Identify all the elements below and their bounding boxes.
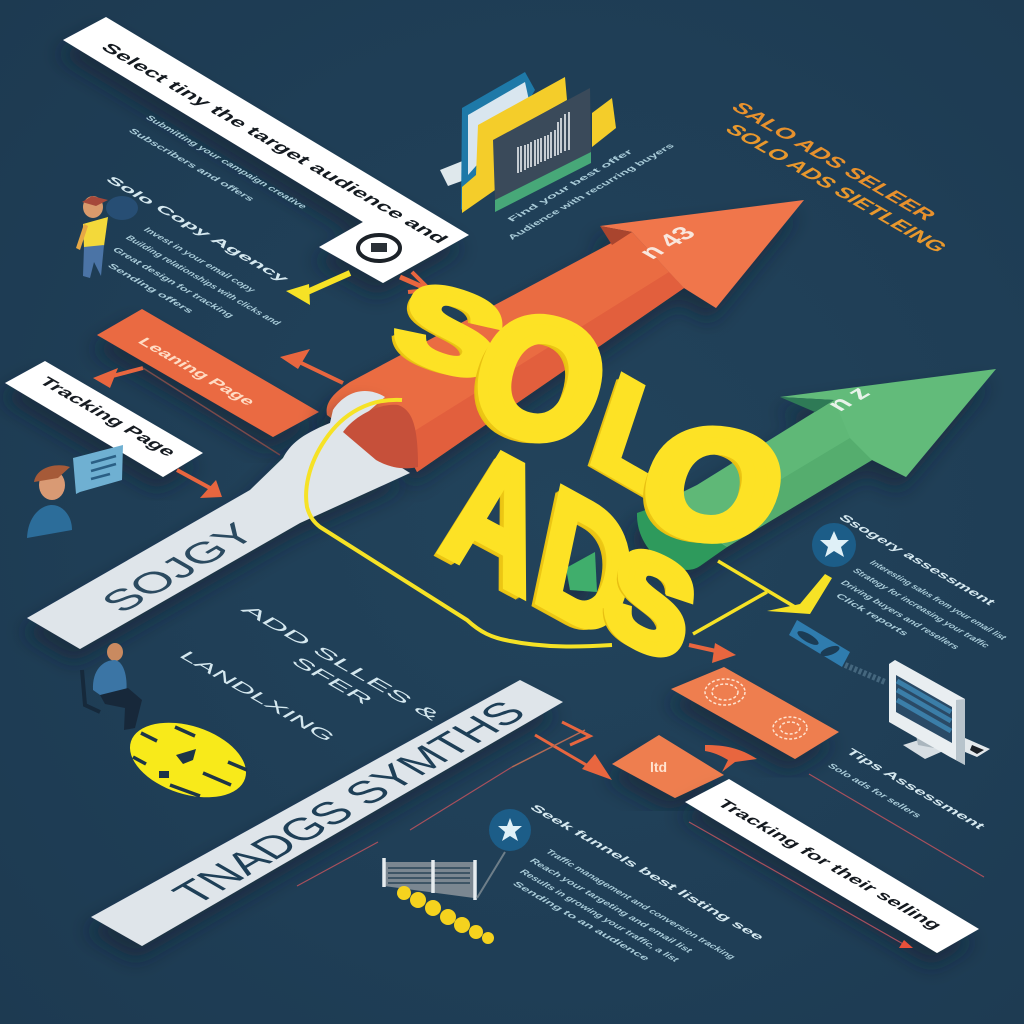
- text block: right strategy: Click reports: [833, 592, 911, 637]
- icon: seated man: [82, 643, 142, 730]
- green piece behind D: [566, 552, 597, 592]
- red guide line lower left: [297, 767, 512, 886]
- banner text: Select tiny the target audience and: [97, 40, 452, 246]
- text block: right strategy: Ssogery assessment: [835, 512, 999, 607]
- icon: yellow coin disc: [120, 709, 256, 811]
- text block: tips assessment: Tips Assessment: [842, 746, 989, 831]
- text block: top left description: Subscribers and offers: [126, 127, 257, 203]
- text block: right strategy: [833, 512, 1009, 651]
- text block: bottom: Sending to an audience: [510, 880, 652, 962]
- headline: SOLO ADS 3D letters: D: [523, 448, 650, 681]
- arrow: left from landing page: [93, 368, 280, 455]
- tube opening: [343, 405, 418, 468]
- text block: solo copy agency: Great design for tracking: [110, 246, 237, 319]
- text block: bottom: [510, 802, 768, 963]
- text block: right strategy: Strategy for increasing your traffic: [850, 567, 992, 649]
- text block: solo copy agency: Sending offers: [105, 262, 196, 315]
- headline: SOLO ADS 3D letters: O: [453, 272, 628, 485]
- text block: add sales and landing: LANDLXING: [175, 648, 340, 744]
- icon: coin beads: [397, 886, 494, 944]
- text block: right strategy: Interesting sales from your email list: [867, 559, 1009, 641]
- yellow loop line: [306, 400, 612, 646]
- text block: bottom: Traffic management and conversion tracking: [543, 848, 738, 961]
- badges: [705, 679, 807, 739]
- text block: under folder: Audience with recurring buyers: [505, 142, 677, 241]
- icon: folder with barcode: [440, 72, 616, 213]
- banner: select target audience: [63, 17, 469, 283]
- icon: fence: [384, 852, 505, 900]
- text block: under folder: Find your best offer: [505, 148, 636, 223]
- arrow: green rising: [566, 369, 996, 592]
- banner text: SOJGY: [92, 517, 267, 619]
- panel: small orange: [612, 735, 724, 798]
- arrow: yellow pointer: [286, 273, 350, 305]
- arrow: orange to small panel: [512, 722, 612, 780]
- headline: SOLO ADS 3D letters: O: [624, 391, 802, 578]
- text block: add sales and landing: SFER: [287, 654, 377, 707]
- arrow: red thin under banner: [689, 774, 984, 948]
- panel label: Leaning Page: [134, 335, 259, 408]
- banner: sojgy: [27, 391, 418, 649]
- arrow: tracking page down: [177, 470, 222, 498]
- arrow marks: n z: [819, 382, 876, 415]
- icon: person in yellow shirt: [76, 196, 138, 278]
- headline: SOLO ADS 3D letters: A: [428, 400, 566, 633]
- arrow: from tube to landing page: [280, 349, 343, 383]
- icon: round badge on banner: [358, 235, 400, 261]
- arrow: orange rising with tube: [327, 200, 804, 472]
- text block: solo copy agency: Invest in your email copy: [141, 226, 258, 294]
- panel: landing page orange: [97, 309, 319, 437]
- text block: bottom: Reach your targeting and email list: [527, 857, 695, 954]
- text block: add sales and landing: [175, 602, 446, 744]
- headline: SOLO ADS 3D letters: S: [381, 255, 519, 406]
- banner text: TNADGS SYMTHS: [162, 694, 537, 911]
- icon: man with speech bubble: [27, 445, 123, 538]
- icon: blue chip: [789, 620, 885, 682]
- headline: SOLO ADS 3D letters: [381, 255, 802, 688]
- headline: SOLO ADS 3D letters: S: [592, 517, 708, 688]
- text block: solo copy agency: Building relationships with clicks and: [123, 234, 283, 327]
- title: solo ads seller orange: [720, 99, 952, 256]
- panel: orange with badges: [671, 667, 839, 759]
- arrow: orange small by panel two: [689, 643, 736, 663]
- text block: top left description: Submitting your campaign creative: [143, 114, 310, 210]
- text block: solo copy agency: Solo Copy Agency: [102, 174, 294, 285]
- text block: bottom: Seek funnels best listing see: [526, 802, 768, 942]
- banner: trends systems: [91, 680, 563, 946]
- panel: tracking page white: [5, 361, 203, 477]
- text block: add sales and landing: ADD SLLES &: [237, 602, 446, 724]
- text block: under folder: [505, 142, 677, 241]
- banner: tracking white: [685, 779, 979, 953]
- icon: star badge bottom: [489, 809, 531, 851]
- text block: tips assessment: [825, 746, 989, 831]
- banner text: Tracking for their selling: [713, 797, 945, 932]
- green base: [637, 505, 727, 570]
- panel mark: ltd: [650, 759, 667, 775]
- text block: top left description: [126, 114, 310, 210]
- icon: star badge right: [812, 523, 856, 567]
- arrow: orange connector to headline: [400, 272, 430, 292]
- text block: right strategy: Driving buyers and resellers: [838, 579, 962, 651]
- arrow: yellow down to blue chip: [693, 561, 832, 634]
- text block: tips assessment: Solo ads for sellers: [825, 762, 924, 819]
- text block: bottom: Results in growing your traffic, a list: [517, 868, 682, 963]
- title: solo ads seller orange: SOLO ADS SIETLEING: [720, 121, 952, 256]
- tracking label: Tracking Page: [35, 374, 181, 459]
- arrow marks: n 43: [631, 222, 702, 263]
- title: solo ads seller orange: SALO ADS SELEER: [726, 99, 941, 224]
- icon: monitor: [889, 660, 990, 765]
- headline: SOLO ADS 3D letters: L: [577, 345, 699, 529]
- arrow: curved orange by small panel: [705, 745, 757, 772]
- barcode: [518, 112, 569, 173]
- text block: solo copy agency: [102, 174, 294, 327]
